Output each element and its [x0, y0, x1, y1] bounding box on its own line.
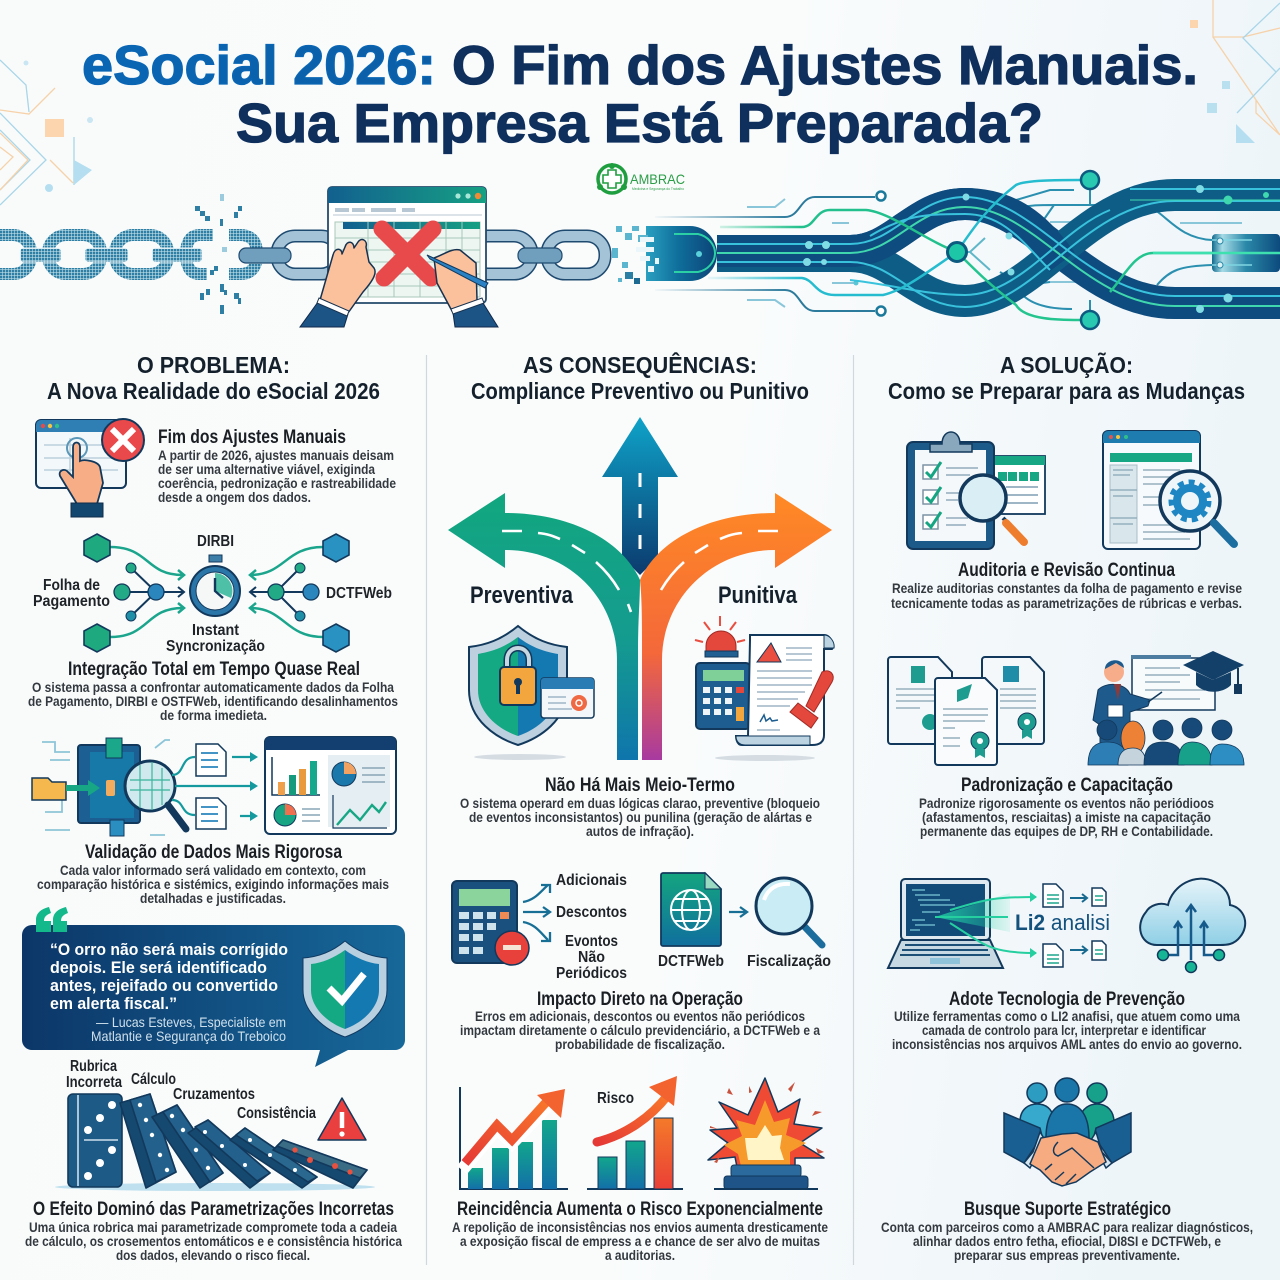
text: Fim dos Ajustes Manuais: Fim dos Ajustes Manuais [158, 427, 346, 448]
icon: laptop with analysis [888, 879, 1110, 968]
labels: impacts: Descontos [556, 904, 627, 921]
icon: magnifier fiscalização [747, 878, 831, 970]
callout: quote [22, 907, 405, 1067]
logo: AMBRAC: AMBRAC [630, 171, 685, 187]
banner: spreadsheet with red X and hands [300, 187, 498, 327]
banner: digital braided cables [612, 171, 1280, 329]
label: Preventiva: Preventiva [470, 582, 574, 609]
labels: dominos: Rubrica [70, 1058, 117, 1075]
text: Validação de Dados [37, 842, 389, 906]
text: Efeito Dominó: O Efeito Dominó das Parametrizações Incorretas [33, 1199, 394, 1220]
heading: O Problema: O PROBLEMA: [137, 352, 290, 378]
chart: rising bars with zigzag arrow [460, 1087, 568, 1189]
labels: integration sources: Syncronização [166, 638, 265, 655]
text: Não Há Mais Meio-Termo: autos de infração). [586, 824, 694, 839]
heading: A Solução [888, 351, 1245, 404]
title: eSocial 2026: [82, 34, 436, 96]
text: Impacto Direto [460, 989, 820, 1052]
text: Adote Tecnologia: camada de controlo para lcr, interpretar e identificar [922, 1023, 1207, 1038]
text: Busque Suporte: alinhar dados entro fetha, efiocial, DI8SI e DCTFWeb, e [913, 1234, 1221, 1249]
text: Fim dos Ajustes Manuais [158, 427, 396, 505]
text: Integração Total: Integração Total em Tempo Quase Real [68, 659, 360, 680]
icon: config review window [1103, 431, 1234, 549]
icon: shield with padlock [469, 626, 594, 760]
text: Efeito Dominó [25, 1199, 402, 1263]
text: Busque Suporte [881, 1199, 1253, 1263]
text: Padronização: Padronização e Capacitação [961, 775, 1173, 796]
icon: standardized documents [888, 657, 1044, 765]
quote text: em alerta fiscal.” [50, 994, 177, 1013]
icon: three-way road arrows [448, 417, 832, 760]
text: Validação de Dados: Cada valor informado será validado em contexto, com [60, 863, 366, 878]
text: Busque Suporte: Busque Suporte Estratégico [964, 1199, 1171, 1220]
quote attribution: — Lucas Esteves, Especialiste em [96, 1014, 286, 1030]
labels: integration sources: Pagamento [33, 593, 110, 610]
heading: As Consequências: AS CONSEQUÊNCIAS: [523, 351, 757, 378]
labels: impacts: Não [578, 949, 605, 966]
text: Impacto Direto: Erros em adicionais, descontos ou eventos não periódicos [475, 1009, 805, 1024]
icon: DCTFWeb document: DCTFWeb [658, 953, 724, 970]
icon: alarm, calculator and notice [695, 616, 834, 761]
heading: O Problema [47, 352, 380, 404]
quote attribution: Matlantie e Segurança do Treboico [91, 1028, 286, 1044]
panel: O Problema [22, 352, 405, 1263]
text: Adote Tecnologia [892, 989, 1242, 1052]
labels: impacts [556, 872, 627, 982]
text: Impacto Direto: probabilidade de fiscalização. [555, 1037, 725, 1052]
panel: As Consequências [448, 351, 834, 1263]
label: Punitiva: Punitiva [718, 582, 798, 609]
icon: explosion [708, 1078, 824, 1189]
text: Reincidência: A repolição de inconsistências nos envios aumenta dresticamente [452, 1220, 828, 1235]
text: Não Há Mais Meio-Termo: Não Há Mais Meio-Termo [545, 775, 735, 796]
text: Integração Total: O sistema passa a confrontar automaticamente dados da Folha [32, 680, 394, 695]
title: Sua Empresa Está Preparada? [236, 92, 1043, 154]
icon: DCTFWeb document [658, 873, 724, 970]
text: Não Há Mais Meio-Termo: de eventos inconsistantos) ou punilina (geração de alártas e [469, 810, 812, 825]
labels: dominos: Incorreta [66, 1074, 122, 1091]
title: O Fim dos Ajustes Manuais. [452, 34, 1198, 96]
icon: handshake and partners [1004, 1078, 1131, 1186]
text: Validação de Dados: Validação de Dados Mais Rigorosa [85, 842, 342, 863]
label: Li2 analisi: Li2 analisi [1015, 910, 1110, 935]
text: Impacto Direto: impactam diretamente o cálculo previdenciário, a DCTFWeb e a [460, 1023, 820, 1038]
text: Integração Total: de forma imedieta. [160, 708, 267, 723]
icon: magnifier fiscalização: Fiscalização [747, 953, 831, 970]
labels: dominos: Consistência [237, 1105, 316, 1122]
icon: quotation marks [36, 907, 68, 932]
text: Fim dos Ajustes Manuais: desde a ongem dos dados. [158, 490, 311, 505]
text: Fim dos Ajustes Manuais: coerência, pedronização e rastreabilidade [158, 476, 396, 491]
text: Reincidência: a auditorias. [605, 1248, 675, 1263]
arrow: to fiscalização [729, 907, 747, 917]
text: Fim dos Ajustes Manuais: A partir de 2026, ajustes manuais deisam [158, 448, 394, 463]
text: Adote Tecnologia: Utilize ferramentas como o LI2 anafisi, que atuem como uma [894, 1009, 1240, 1024]
labels: dominos: Cálculo [131, 1071, 176, 1088]
quote text: “O orro não será mais corrígido [50, 940, 288, 959]
decorative corner lines [0, 0, 1280, 205]
text: Efeito Dominó: dos dados, elevando o risco fiecal. [116, 1248, 310, 1263]
icon: clipboard audit [907, 432, 1045, 549]
labels: integration sources: Folha de [43, 577, 100, 594]
heading: As Consequências: Compliance Preventivo ou Punitivo [471, 378, 809, 404]
icon: manual click forbidden [36, 419, 144, 517]
text: Não Há Mais Meio-Termo: O sistema operard em duas lógicas clarao, preventive (bloqueio [460, 796, 820, 811]
icon: shield check [303, 941, 387, 1037]
labels: impacts: Adicionais [556, 872, 627, 889]
text: Reincidência: a exposição fiscal de empress a e chance de ser alvo de muitas [460, 1234, 820, 1249]
labels: integration sources: DCTFWeb [326, 585, 392, 602]
text: Padronização: permanente das equipes de DP, RH e Contabilidade. [920, 824, 1213, 839]
quote text: antes, rejeifado ou convertido [50, 976, 278, 995]
text: Efeito Dominó: de cálculo, os crosementos entomáticos e e consistência histórica [25, 1234, 402, 1249]
text: Validação de Dados: detalhadas e justificadas. [140, 891, 286, 906]
text: Validação de Dados: comparação histórica e sistémics, exigindo informações mais [37, 877, 389, 892]
heading: A Solução: Como se Preparar para as Mudanças [888, 378, 1245, 404]
text: Efeito Dominó: Uma única robrica mai parametrizade compromete toda a cadeia [29, 1220, 397, 1235]
labels: integration sources: Instant [192, 622, 239, 639]
text: Não Há Mais Meio-Termo [460, 775, 820, 839]
text: Impacto Direto: Impacto Direto na Operação [537, 989, 743, 1010]
chart: risk bars [587, 1076, 683, 1189]
quote text [50, 940, 288, 1013]
labels: dominos: Cruzamentos [173, 1086, 255, 1103]
labels: dominos [66, 1058, 316, 1122]
diagram: real-time integration [84, 534, 349, 652]
text: Integração Total: de Pagamento, DIRBI e OSTFWeb, identificando desalinhamentos [28, 694, 398, 709]
labels: impacts: Evontos [565, 933, 618, 950]
labels: impacts: Periódicos [556, 965, 627, 982]
text: Fim dos Ajustes Manuais: de ser uma alternative viável, exiginda [158, 462, 375, 477]
text: Auditoria: Realize auditorias constantes da folha de pagamento e revise [892, 581, 1242, 596]
banner: broken pixel chain [0, 194, 257, 314]
banner: metal chain links [239, 236, 605, 274]
text: Integração Total [28, 659, 398, 723]
icon: calculator with minus [452, 881, 529, 965]
text: Busque Suporte: preparar sus empreas preventivamente. [954, 1248, 1180, 1263]
arrows: impacts [523, 885, 550, 941]
text: Adote Tecnologia: Adote Tecnologia de Prevenção [949, 989, 1185, 1010]
icon: cloud with circuits [1140, 879, 1245, 972]
labels: integration sources: DIRBI [197, 533, 234, 550]
logo: AMBRAC [597, 163, 685, 193]
text: Padronização [919, 775, 1214, 839]
heading: As Consequências [471, 351, 809, 404]
text: Padronização: Padronize rigorosamente os eventos não periódioos [919, 796, 1214, 811]
text: Reincidência: Reincidência Aumenta o Risco Exponencialmente [457, 1199, 823, 1220]
text: Reincidência [452, 1199, 828, 1263]
labels: integration sources [33, 533, 392, 655]
panel: A Solução [881, 351, 1253, 1263]
icon: training session [1088, 651, 1244, 765]
heading: A Solução: A SOLUÇÃO: [1000, 351, 1133, 378]
heading: O Problema: A Nova Realidade do eSocial 2026 [47, 378, 380, 404]
text: Padronização: (afastamentos, resciaitas) a imiste na capacitação [922, 810, 1211, 825]
diagram: data validation [32, 737, 396, 836]
chart: risk bars: Risco [597, 1090, 634, 1107]
title [82, 34, 1198, 154]
quote text: depois. Ele será identificado [50, 958, 267, 977]
text: Auditoria: tecnicamente todas as parametrizações de rúbricas e verbas. [891, 596, 1242, 611]
text: Auditoria: Auditoria e Revisão Continua [958, 560, 1175, 581]
diagram: domino effect [55, 1058, 375, 1191]
quote attribution [91, 1014, 286, 1044]
text: Auditoria [891, 560, 1242, 611]
logo: AMBRAC: Medicina e Segurança do Trabalho [632, 186, 685, 191]
column dividers [426, 355, 854, 1265]
